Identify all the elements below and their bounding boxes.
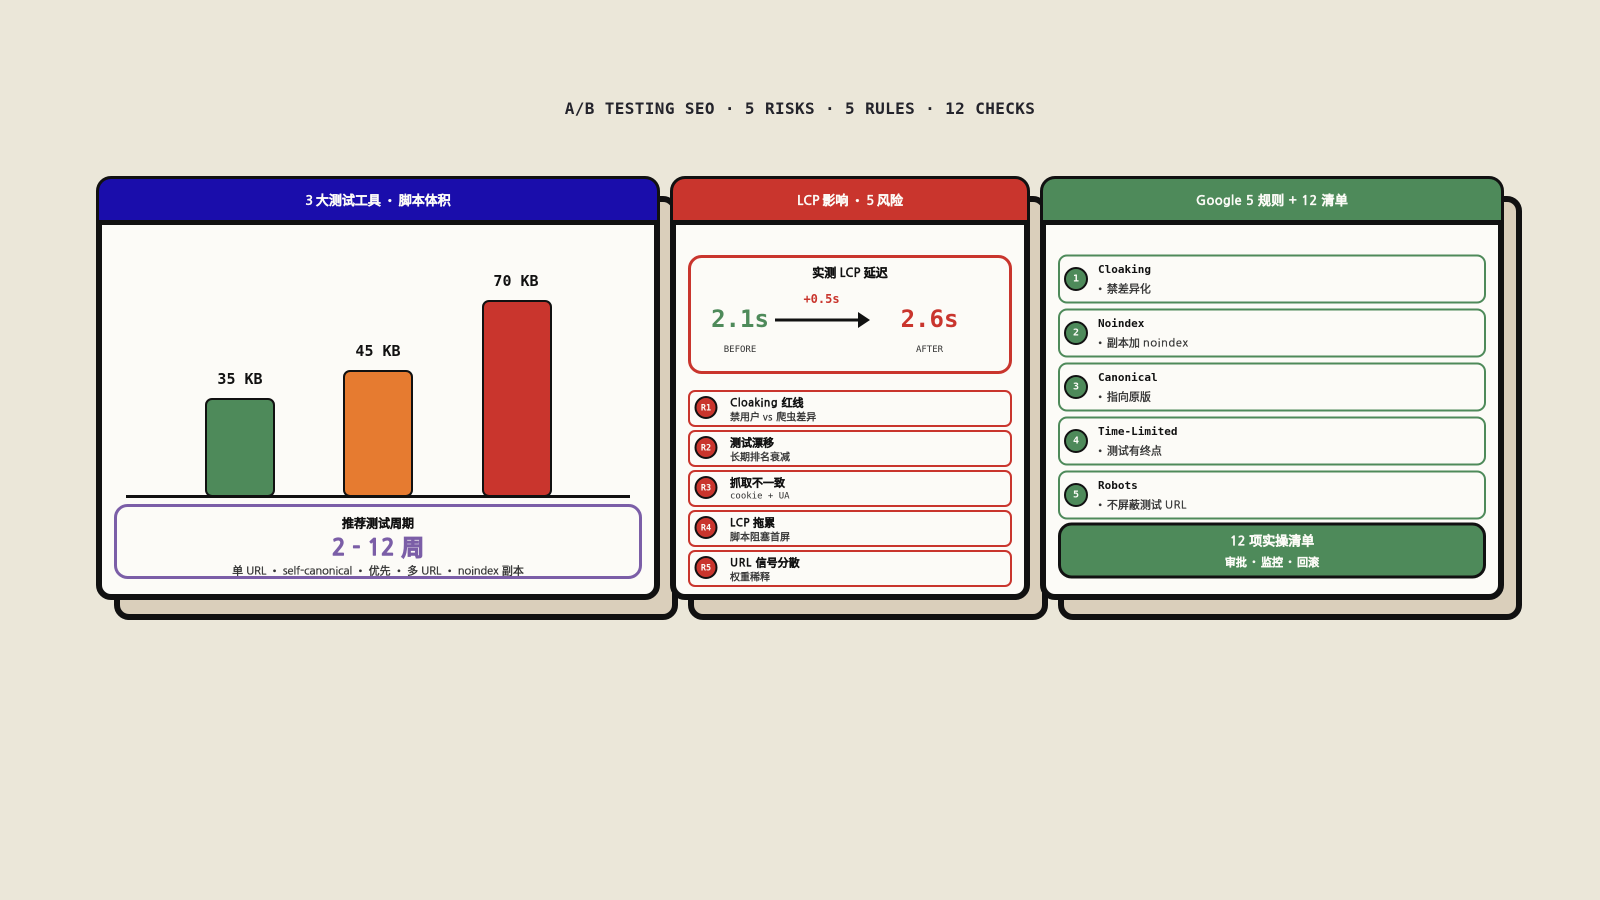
bar chart: 70 KB [493, 272, 539, 290]
rule 1 [1059, 256, 1485, 302]
panel shadow [1061, 199, 1519, 617]
checklist callout: 审批 • 监控 • 回滚 [1225, 555, 1320, 568]
risk R3: cookie + UA [730, 492, 790, 502]
rule 1: 1 [1073, 274, 1079, 284]
rule 3 [1059, 364, 1485, 410]
rule 2 [1059, 310, 1485, 356]
risk R4 [689, 511, 1011, 546]
rule 4 [1059, 418, 1485, 464]
panel header [673, 179, 1027, 225]
checklist callout: 12 项实操清单 [1230, 534, 1314, 548]
bar chart [126, 272, 630, 498]
LCP delay box: 2.1s [711, 305, 769, 333]
rule 2: 2 [1073, 328, 1079, 338]
risk R1: 禁用户 vs 爬虫差异 [730, 410, 816, 422]
rule list [1059, 256, 1485, 518]
panel header [1043, 179, 1501, 225]
risk R1 [689, 391, 1011, 426]
LCP delay box: 实测 LCP 延迟 [812, 265, 888, 279]
panel: LCP impact and risks [673, 179, 1045, 617]
panel header: 3 大测试工具 • 脚本体积 [305, 193, 451, 208]
panel shadow [117, 199, 675, 617]
rule 5: • 不屏蔽测试 URL [1095, 498, 1187, 510]
risk R4: LCP 拖累 [730, 516, 775, 528]
LCP delay box: 2.6s [901, 305, 958, 333]
risk R1: Cloaking 红线 [730, 396, 804, 408]
rule 4: • 测试有终点 [1095, 444, 1162, 456]
rule 3: • 指向原版 [1095, 390, 1151, 402]
checklist callout [1060, 524, 1484, 577]
risk R2: R2 [701, 444, 711, 454]
bar chart: 45 KB [355, 342, 401, 360]
risk R2 [689, 431, 1011, 466]
panel body [99, 179, 657, 597]
panel header: LCP 影响 • 5 风险 [797, 193, 904, 208]
LCP delay box: AFTER [916, 345, 944, 355]
risk R5: R5 [701, 564, 711, 574]
risk list [689, 391, 1011, 586]
risk R3: 抓取不一致 [730, 476, 786, 488]
panel header [99, 179, 657, 225]
rule 4: Time-Limited [1098, 425, 1177, 438]
bar chart: 35 KB [217, 370, 263, 388]
risk R4: R4 [701, 524, 711, 534]
callout: recommended test duration [116, 506, 640, 578]
title: A/B TESTING SEO · 5 RISKS · 5 RULES · 12 CHECKS [565, 99, 1035, 118]
risk R5: URL 信号分散 [730, 556, 801, 568]
callout: recommended test duration: 推荐测试周期 [342, 516, 414, 530]
rule 3: 3 [1073, 382, 1079, 392]
rule 2: • 副本加 noindex [1095, 336, 1189, 348]
risk R1: R1 [701, 404, 711, 414]
panel: test tools and script size [99, 179, 675, 617]
rule 1: Cloaking [1098, 263, 1151, 276]
rule 5 [1059, 472, 1485, 518]
rule 1: • 禁差异化 [1095, 282, 1151, 294]
panel shadow [691, 199, 1045, 617]
risk R5 [689, 551, 1011, 586]
risk R4: 脚本阻塞首屏 [730, 530, 790, 542]
arrow [775, 312, 870, 328]
rule 2: Noindex [1098, 317, 1145, 330]
callout: recommended test duration: 2 - 12 周 [332, 536, 424, 560]
risk R5: 权重稀释 [730, 570, 770, 582]
rule 5: Robots [1098, 479, 1138, 492]
callout: recommended test duration: 单 URL • self-canonical • 优先 • 多 URL • noindex 副本 [232, 564, 524, 576]
LCP delay box: BEFORE [724, 345, 756, 355]
risk R3: R3 [701, 484, 711, 494]
panel: Google rules and checklist [1043, 179, 1519, 617]
rule 5: 5 [1073, 490, 1079, 500]
risk R2: 长期排名衰减 [730, 450, 790, 462]
rule 3: Canonical [1098, 371, 1158, 384]
LCP delay box: +0.5s [803, 292, 840, 306]
LCP delay box [690, 256, 1010, 372]
risk R3 [689, 471, 1011, 506]
panel body [1043, 179, 1501, 597]
panel header: Google 5 规则 + 12 清单 [1196, 193, 1348, 208]
panel body [673, 179, 1027, 597]
rule 4: 4 [1073, 436, 1079, 446]
risk R2: 测试漂移 [730, 436, 774, 448]
